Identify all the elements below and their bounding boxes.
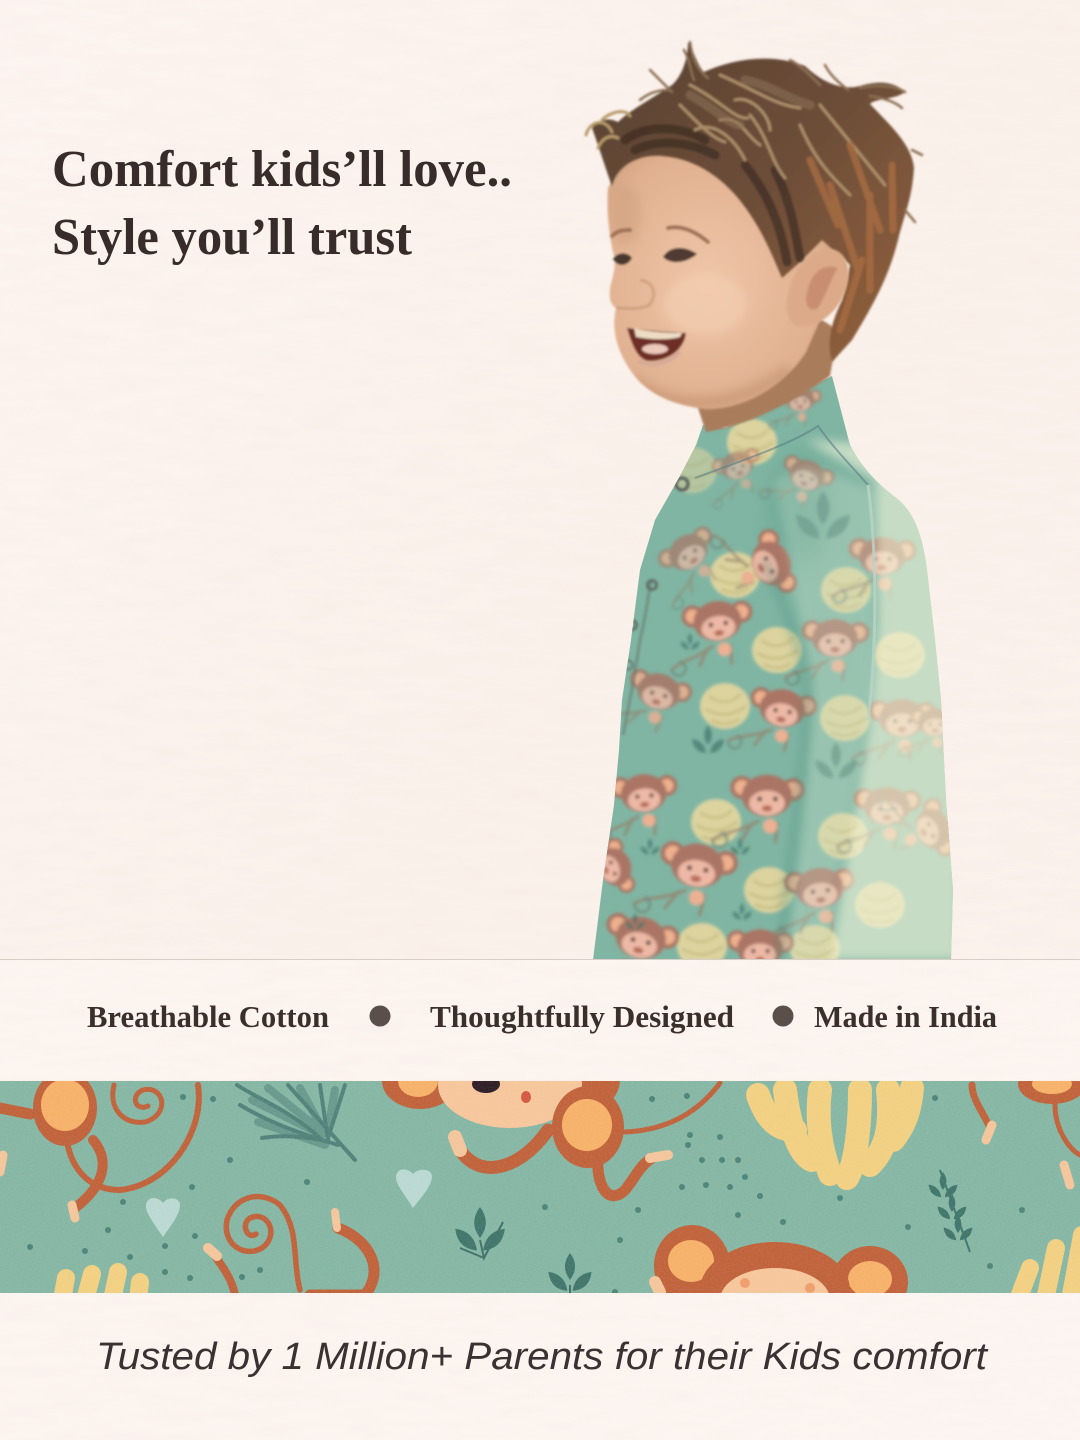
feature: made in india: Made in India [814,999,997,1034]
bottom monkey [649,1225,908,1293]
title: Style you’ll trust [52,209,413,266]
mouth [627,328,686,361]
pale lit sleeve [806,440,960,960]
sprigs [455,1170,972,1293]
banana leaf [758,1088,912,1178]
bullet [370,1006,390,1026]
sleeve shadow [765,560,808,960]
ear [787,249,849,326]
hair texture [586,42,922,330]
hearts [146,1169,432,1237]
fabric print band [0,1081,1080,1293]
feature: thoughtfully designed: Thoughtfully Designed [430,999,734,1034]
center monkey [382,1081,722,1202]
left monkey [0,1070,199,1218]
feature: breathable cotton: Breathable Cotton [87,999,329,1034]
title: Comfort kids’ll love.. [52,141,512,198]
trust statement: Tusted by 1 Million+ Parents for their Kids comfort [96,1336,989,1378]
kurta [593,376,953,959]
palm leaf [237,1085,355,1160]
features strip [0,959,1080,1080]
footer strip [0,1293,1080,1440]
nose shading [616,280,654,308]
cheek and jaw shading [609,185,790,403]
collar seam [695,426,868,485]
lower yellow leaves [62,1235,1080,1300]
right monkey [972,1064,1080,1185]
lower left tail and arm [208,1197,374,1295]
placket buttons [623,478,688,735]
brows [612,227,708,242]
scattered dots [27,1093,1025,1295]
hair [586,42,922,362]
bullet [772,1006,794,1026]
title [52,141,512,266]
eyes [613,253,632,265]
neck and face [607,140,845,432]
kurta print [603,388,950,959]
photo: smiling boy in monkey print kurta [564,42,960,996]
